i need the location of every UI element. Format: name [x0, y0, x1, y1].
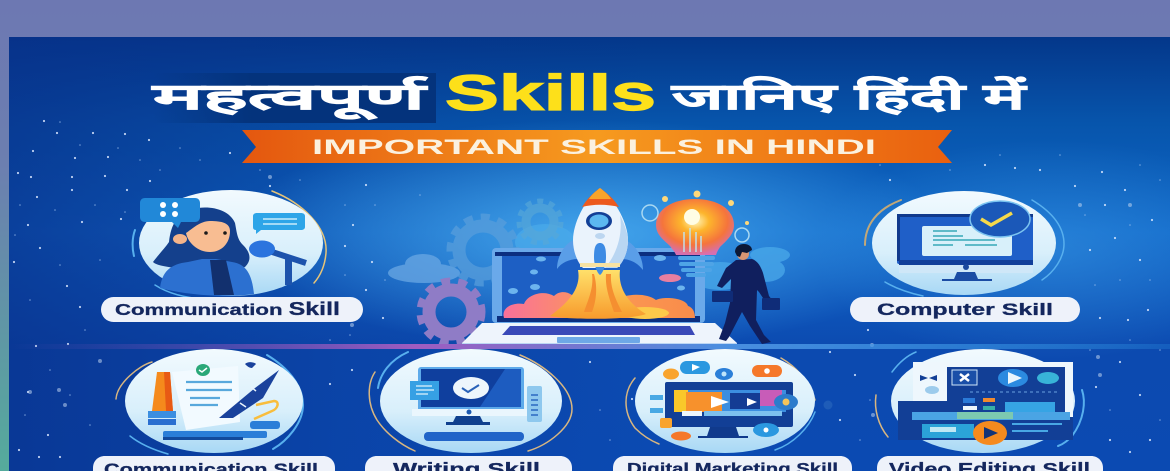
document page: [172, 364, 240, 430]
label: Video Editing Skill: [877, 456, 1103, 471]
skill: Digital Marketing: [626, 349, 832, 453]
disc: [380, 349, 562, 453]
label: Communication Skill bottom: [93, 456, 335, 471]
label: Computer Skill: Computer Skill: [877, 300, 1053, 319]
disc: [872, 191, 1056, 295]
label: Writing Skill: [365, 456, 572, 471]
orange ribbon subtitle: [242, 130, 952, 163]
orbit rings: [116, 355, 303, 454]
gear: purple: [420, 281, 482, 343]
speech bubble with dots: [140, 198, 200, 228]
title: [151, 65, 1028, 123]
monitor with video: [665, 382, 793, 438]
label: Digital Marketing Skill: [613, 456, 852, 471]
title hindi part 1: महत्वपूर्ण: [151, 76, 430, 120]
orange ribbon subtitle: IMPORTANT SKILLS IN HINDI: [312, 136, 876, 159]
title hindi part 2: जानिए हिंदी में: [670, 76, 1028, 117]
speech bubble with lines: [253, 213, 305, 234]
desktop monitor: [412, 367, 542, 441]
central illustration: rocket launching from laptop: [388, 188, 790, 346]
skill: Video Editing: [876, 349, 1084, 453]
label: Computer Skill: [850, 297, 1080, 322]
monitor: [897, 214, 1033, 281]
orange play button: [973, 421, 1007, 445]
close button tile: [952, 370, 977, 385]
laptop: [462, 248, 737, 346]
gear: small blue: [519, 201, 561, 243]
disc: [125, 349, 303, 453]
skill: Writing (desktop with tick): [369, 349, 572, 453]
woman portrait: [153, 208, 254, 296]
title backing box: [153, 73, 436, 123]
fountain pen: [219, 362, 279, 419]
label: Communication Skill: [101, 297, 363, 322]
teal shape: [1037, 372, 1059, 384]
orbit rings: [865, 200, 1064, 296]
microphone: [249, 240, 306, 285]
orbit rings: [369, 352, 572, 451]
exhaust smoke and flame: [504, 270, 695, 319]
disc: [891, 349, 1075, 453]
title skills word: Skills: [445, 65, 656, 121]
orbit rings: [133, 191, 326, 299]
skill: Communication (writing document): [116, 349, 303, 454]
floating marketing icons: [650, 361, 832, 440]
businessman with briefcase: [712, 244, 780, 344]
play tile: [998, 369, 1028, 387]
orbit rings: [626, 358, 815, 450]
checkmark badge: [970, 201, 1030, 237]
horizontal light strip: [9, 344, 1170, 349]
note card: [410, 381, 439, 400]
disc: [635, 349, 815, 453]
star field: [14, 121, 1160, 457]
orbit rings: [876, 352, 1084, 446]
editing software window: [898, 362, 1073, 440]
rocket: [557, 188, 643, 275]
idea light bulb: [642, 190, 749, 277]
desk stand: [163, 421, 280, 440]
label: Communication Skill: Communication Skill: [115, 299, 340, 319]
tick bubble: [453, 377, 489, 399]
skill: Computer: [865, 191, 1064, 296]
orange book stack: [148, 372, 176, 425]
disc: [139, 190, 323, 296]
skill: Communication (speaking): [133, 190, 326, 299]
gear: large blue: [450, 217, 516, 283]
background clouds: [388, 224, 790, 290]
